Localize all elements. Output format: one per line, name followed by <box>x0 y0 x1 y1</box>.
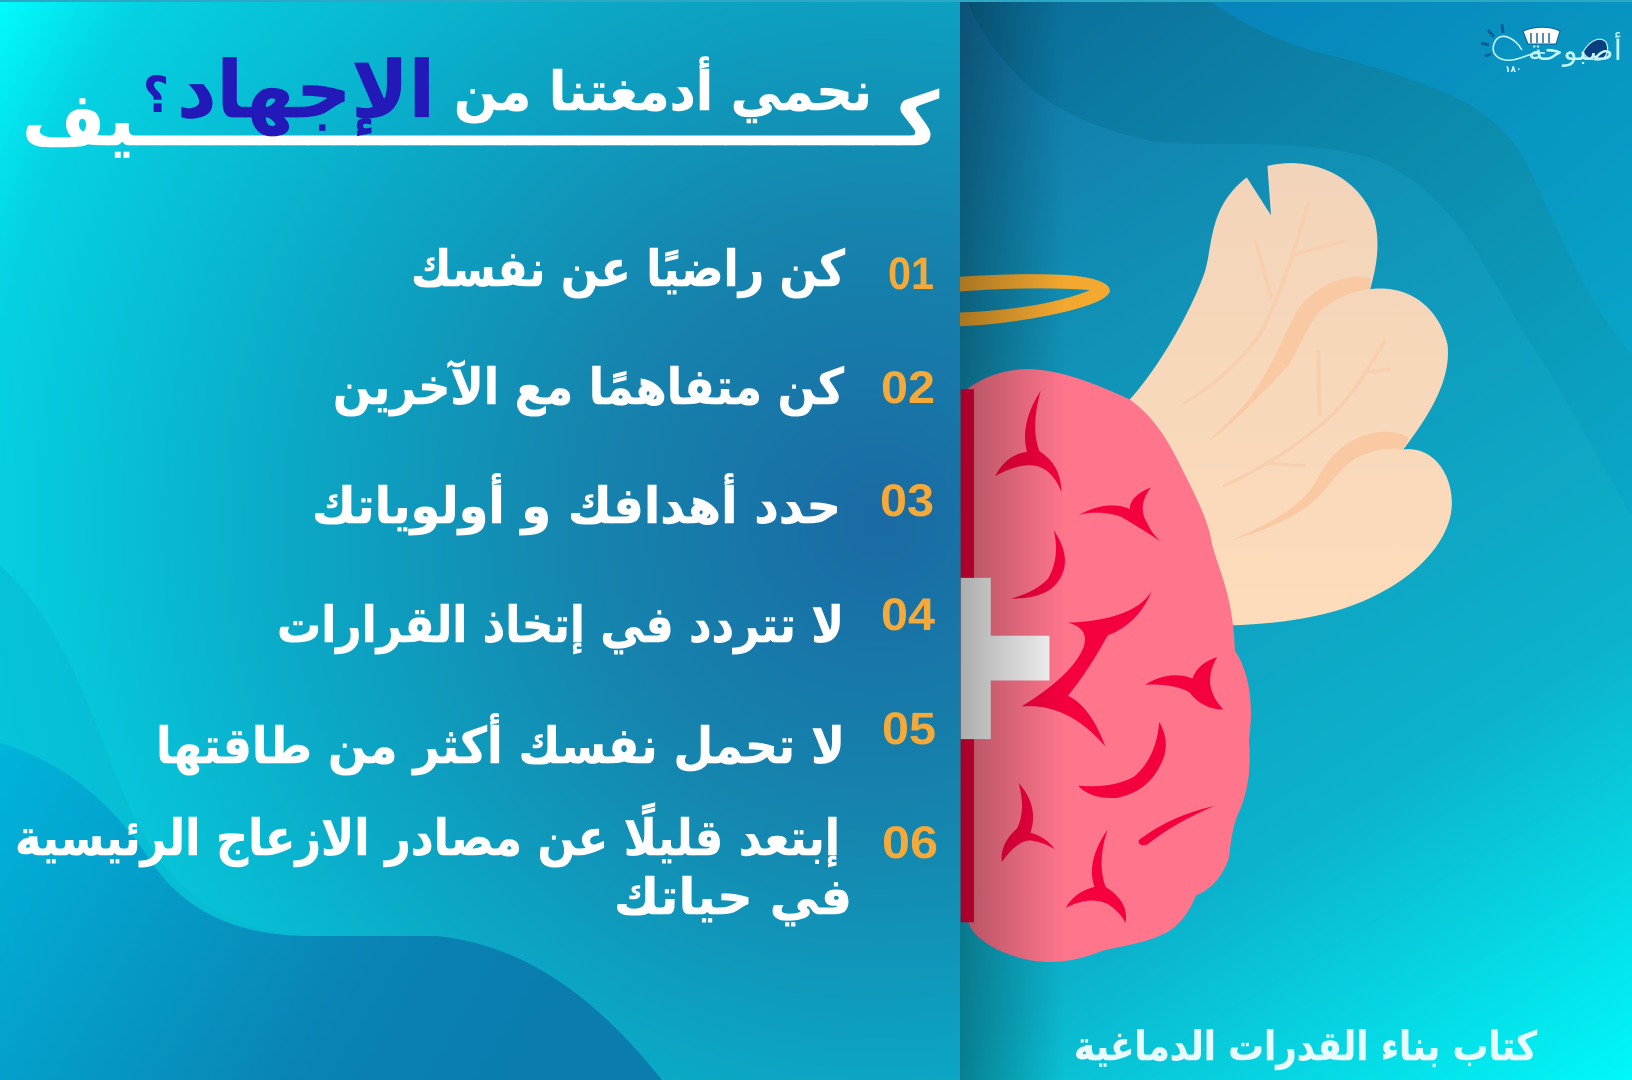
item 01 <box>411 240 934 299</box>
tip text: كن راضيًا عن نفسك <box>411 240 846 299</box>
item 03 <box>312 473 934 536</box>
number: 02 <box>881 362 935 413</box>
title <box>22 46 940 163</box>
top edge line <box>0 0 1632 2</box>
title: question mark: ؟ <box>143 66 169 124</box>
white cross <box>961 578 1049 739</box>
fold shadow <box>960 0 1065 1080</box>
brain folds <box>995 391 1223 923</box>
tip text line 1: إبتعد قليلًا عن مصادر الازعاج الرئيسية <box>15 802 840 868</box>
tip text: لا تتردد في إتخاذ القرارات <box>277 596 844 655</box>
illustration: wing <box>1130 163 1452 625</box>
logo: book icon <box>1523 27 1560 44</box>
item 02 <box>333 358 935 417</box>
number: 05 <box>882 703 936 754</box>
logo: small number: ١٨٠ <box>1505 65 1521 75</box>
logo <box>1481 24 1622 75</box>
illustration: brain <box>961 369 1251 962</box>
red spine strip <box>961 389 974 922</box>
title: stretched first word: كـــــــــــــــــــــــــــــــيف <box>22 77 940 163</box>
illustration: halo <box>953 274 1110 326</box>
tip text: كن متفاهمًا مع الآخرين <box>333 358 845 417</box>
tip text: حدد أهدافك و أولوياتك <box>312 473 841 536</box>
number: 06 <box>882 817 938 868</box>
panel: right illustration background <box>960 0 1632 1080</box>
item 05 <box>156 703 936 776</box>
logo: rays <box>1481 24 1503 56</box>
logo: loop stroke <box>1493 36 1545 60</box>
logo: word: أصبوحة <box>1528 31 1622 67</box>
tip text: لا تحمل نفسك أكثر من طاقتها <box>156 713 845 776</box>
number: 01 <box>888 248 934 299</box>
panel: left text background <box>0 0 960 1080</box>
number: 04 <box>881 589 935 640</box>
title: white words: نحمي أدمغتنا من <box>454 56 872 123</box>
item 06 <box>15 802 938 926</box>
tip text line 2: في حياتك <box>614 868 852 926</box>
number: 03 <box>880 475 934 526</box>
title: blue word: الإجهاد <box>177 46 435 137</box>
footer: book title: كتاب بناء القدرات الدماغية <box>1074 1024 1538 1070</box>
logo: dark blob <box>1583 39 1608 60</box>
item 04 <box>277 589 935 655</box>
